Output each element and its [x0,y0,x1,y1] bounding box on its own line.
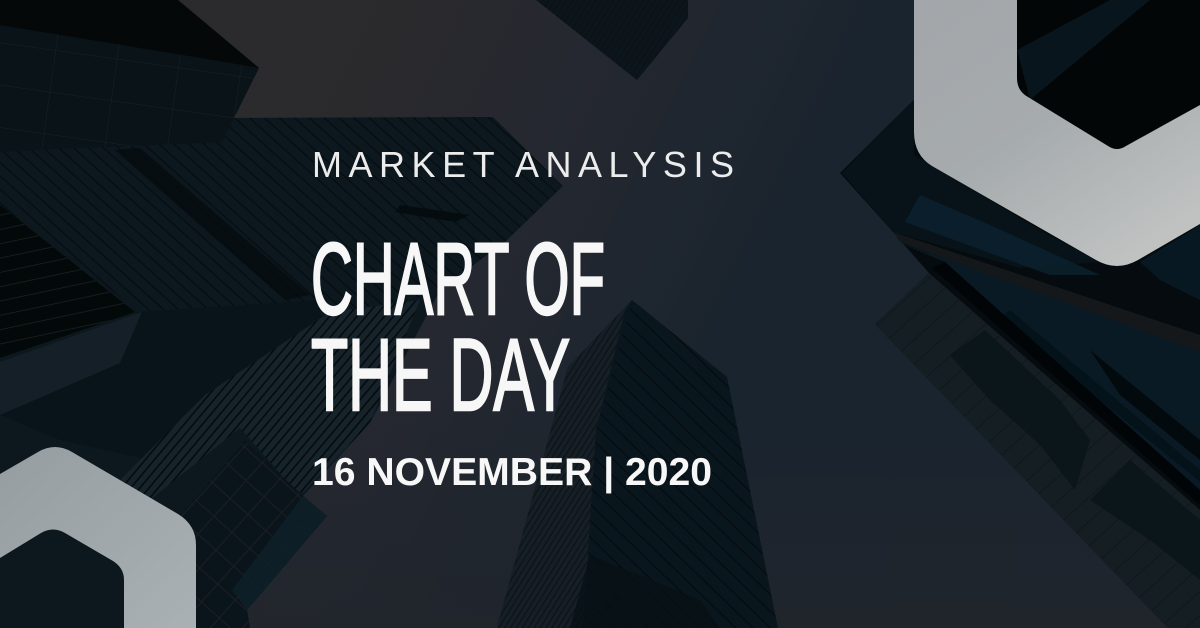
building: right side [840,0,1200,628]
building: top centre [536,0,688,80]
building: top left block [0,0,259,152]
lighter sign panel [0,312,142,415]
hexagon: top right outline [914,0,1200,266]
building: left mid striped block [0,117,563,628]
taupe ledge [893,232,1200,352]
building: centre tower [497,300,778,628]
main dark mass [840,0,1200,628]
building: left dark wedge [0,205,142,415]
kicker: market analysis: MARKET ANALYSIS [312,144,734,185]
date: 16 NOVEMBER | 2020 [312,451,712,494]
title line 2: THE DAY [311,318,570,432]
title: chart of the day [311,222,605,432]
blue lower face [898,242,1200,498]
reflected dark shapes [950,330,1090,490]
striped face [875,273,1200,628]
title line 1: CHART OF [311,222,605,336]
building: lower left curved stripes [120,300,420,500]
dark window band [115,148,310,300]
building: lower left grid windows [120,440,327,628]
black band [932,262,1200,505]
hexagon: bottom left outline [0,447,196,628]
